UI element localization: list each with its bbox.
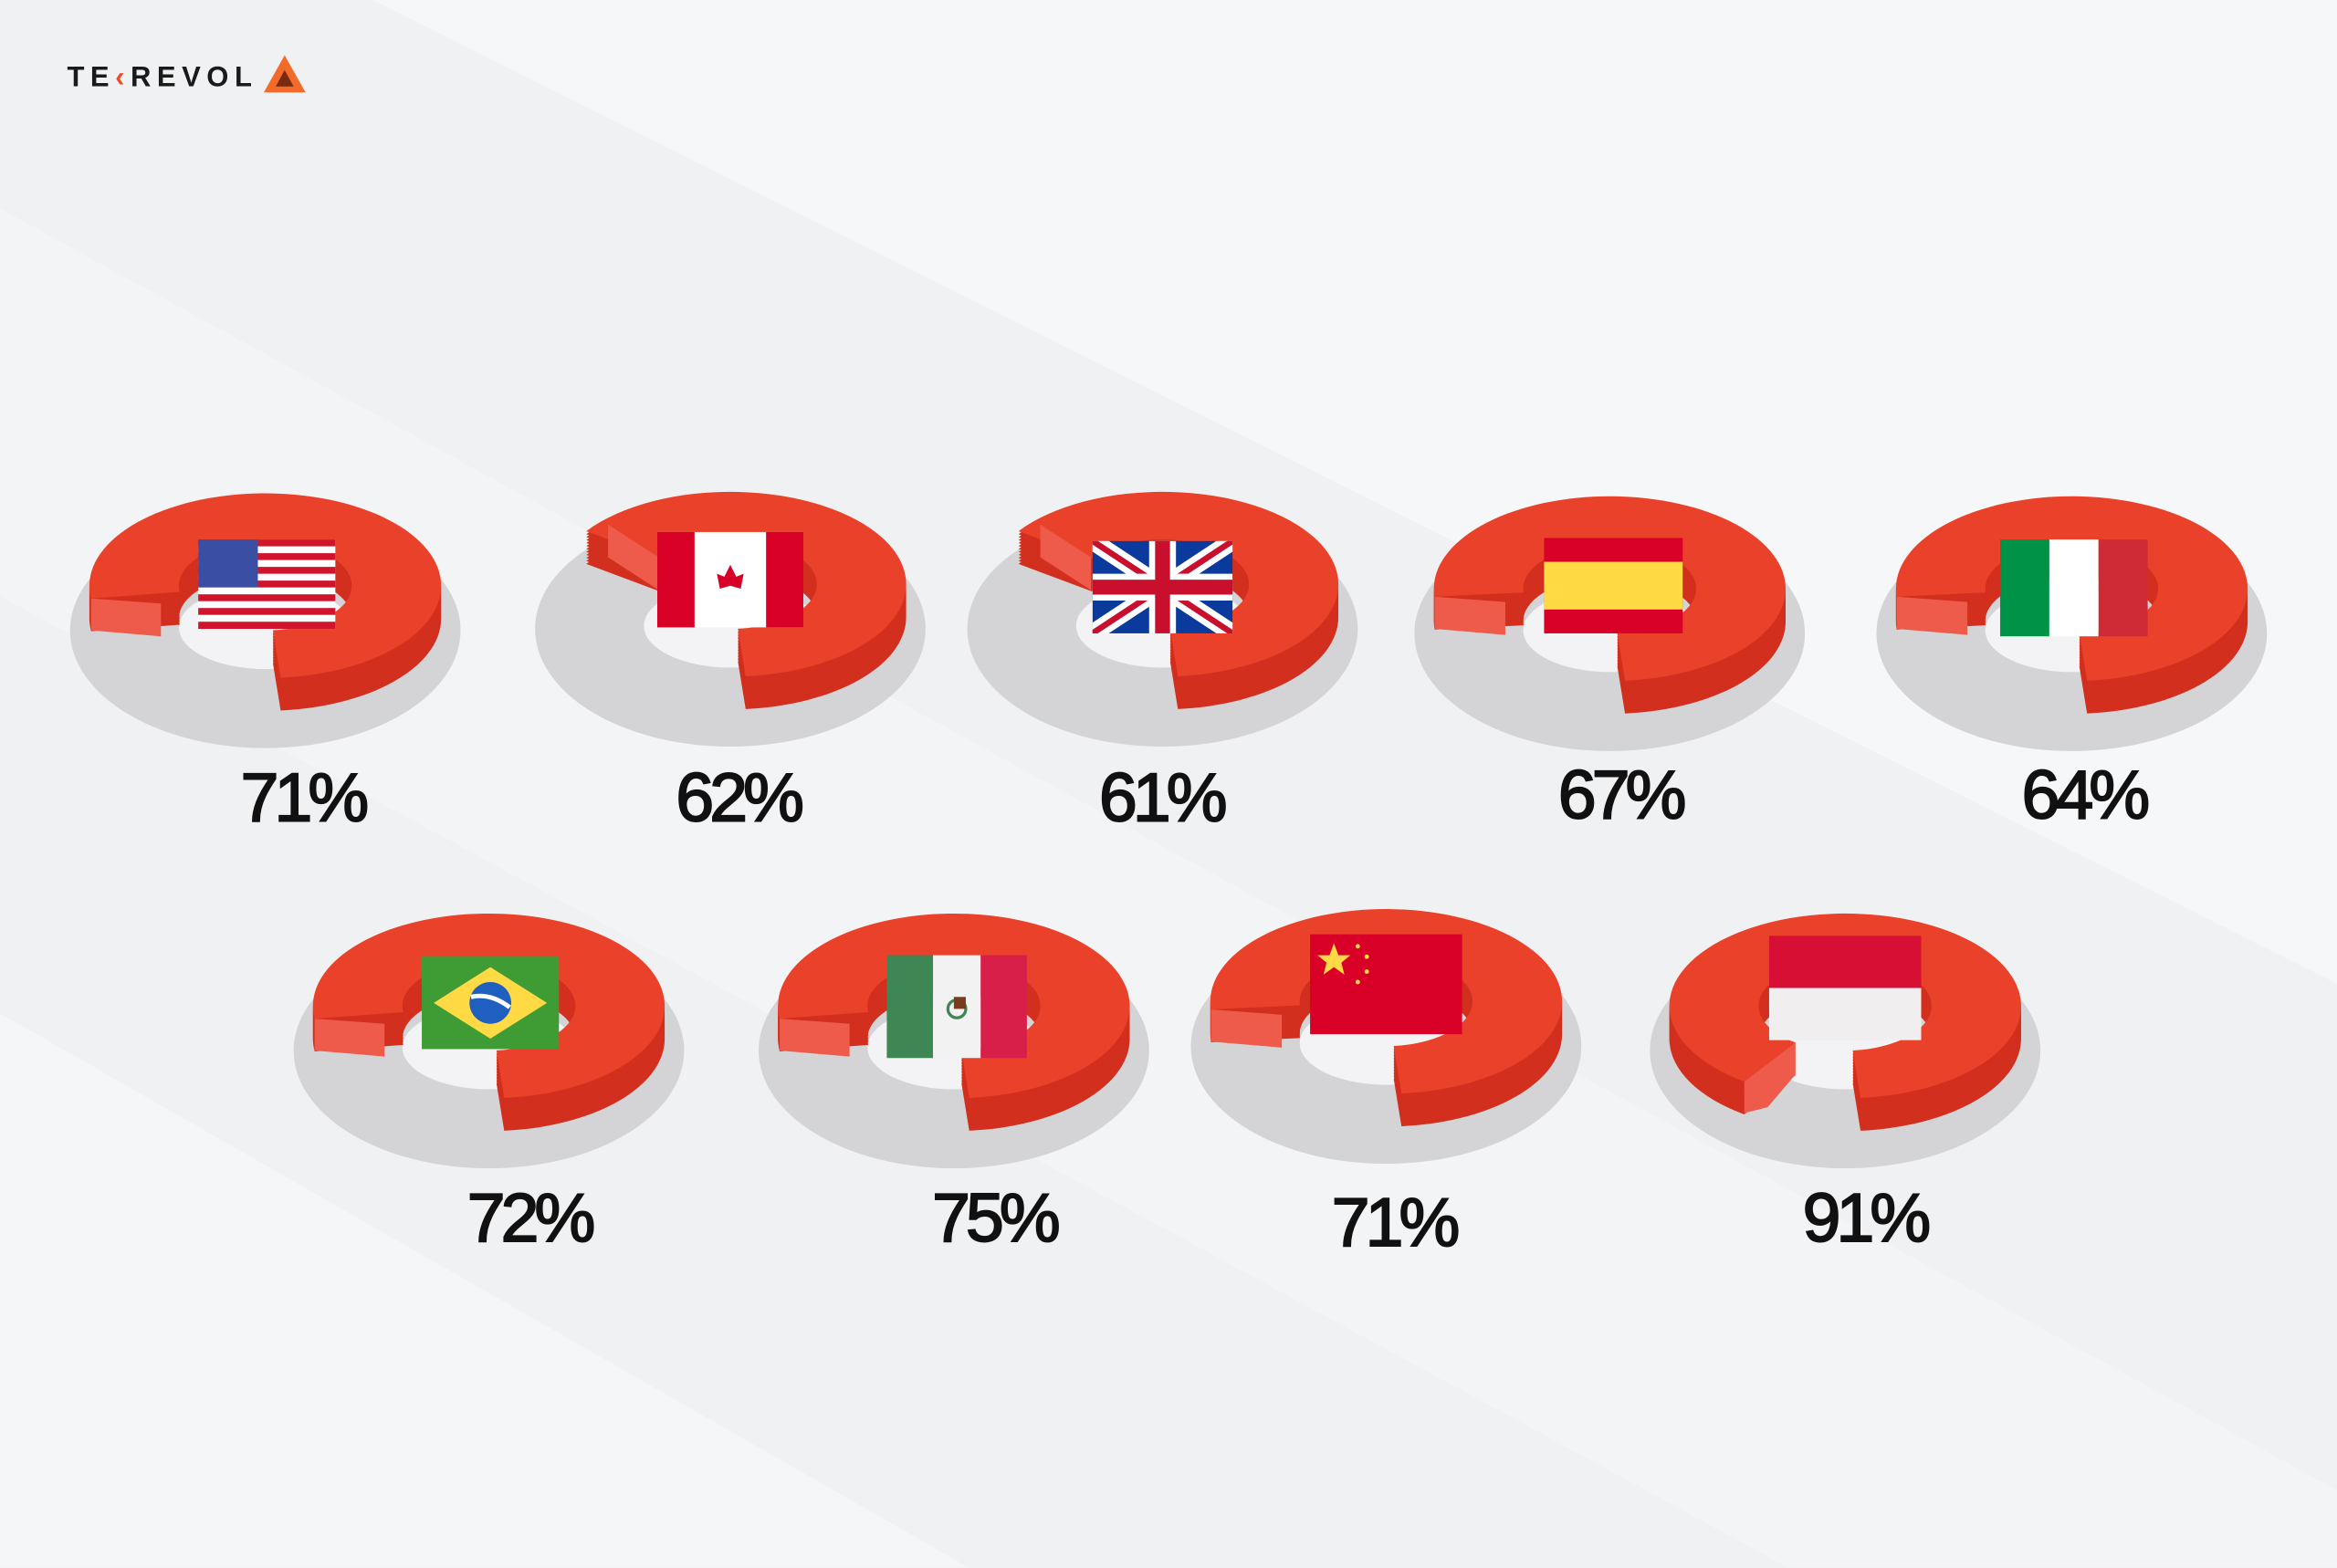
donut: Spain 67% <box>1414 497 1805 751</box>
flag: Mexico <box>886 956 1027 1058</box>
flag: UK <box>1093 541 1232 633</box>
flag: China <box>1310 935 1462 1034</box>
flag: Indonesia <box>1769 936 1921 1040</box>
logo: TE‹REVOL <box>67 61 257 93</box>
donut: Mexico 75% <box>759 914 1149 1168</box>
flag: Canada <box>657 532 803 627</box>
donut: Brazil 72% <box>294 914 684 1168</box>
label: 75%: 75% <box>932 1179 1059 1256</box>
label: 61%: 61% <box>1099 759 1226 836</box>
donut: Italy 64% <box>1877 497 2267 751</box>
donut: UK 61% <box>968 492 1357 747</box>
flag: Italy <box>2000 539 2148 636</box>
flag: Spain <box>1544 538 1682 633</box>
label: 71%: 71% <box>1332 1184 1458 1260</box>
donut: Canada 62% <box>535 492 926 747</box>
label: 67%: 67% <box>1558 756 1685 832</box>
flag: Brazil <box>422 956 559 1049</box>
label: 72%: 72% <box>467 1179 594 1256</box>
donut: China 71% <box>1190 909 1581 1164</box>
label: 91%: 91% <box>1803 1179 1929 1256</box>
flag: USA <box>198 539 335 629</box>
label: 62%: 62% <box>676 759 802 836</box>
donut: Indonesia 91% <box>1650 914 2040 1168</box>
label: 64%: 64% <box>2022 756 2148 832</box>
label: 71%: 71% <box>241 759 367 836</box>
logo <box>67 55 306 93</box>
donut: USA 71% <box>70 494 460 748</box>
